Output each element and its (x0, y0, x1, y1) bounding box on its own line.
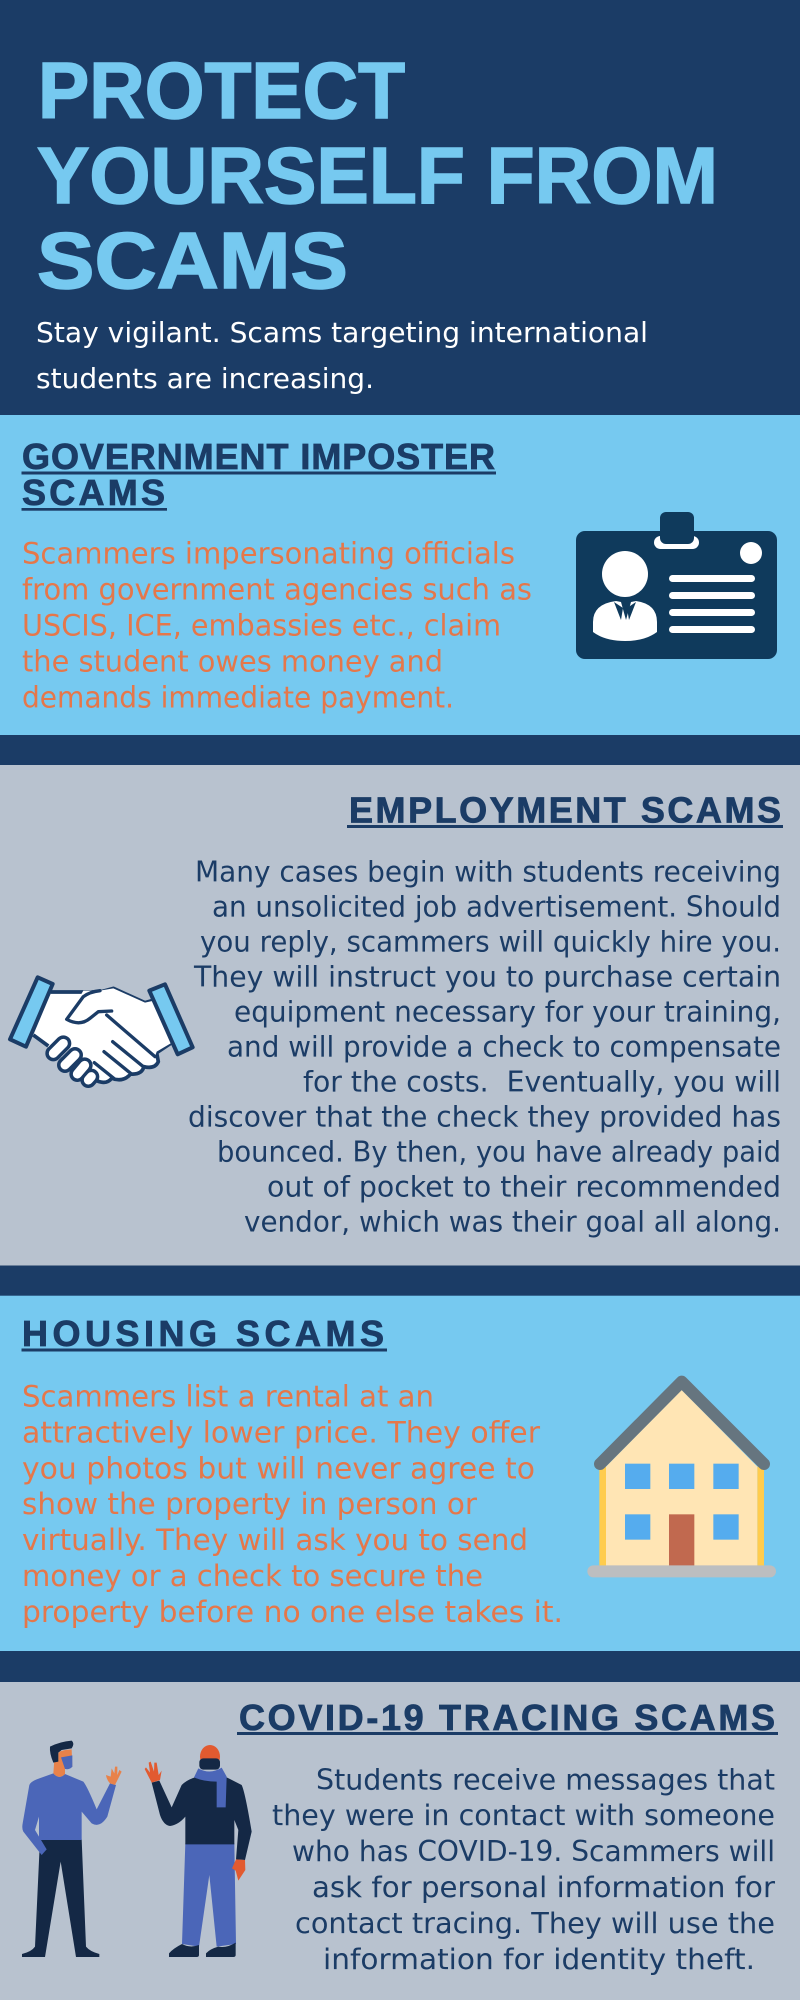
text: government imposter description: the student owes money and (22, 644, 443, 678)
heading: covid-19 tracing scams: COVID-19 TRACING SCAMS (239, 1697, 775, 1738)
text: government imposter description: from government agencies such as (22, 572, 532, 606)
text: covid-19 description: contact tracing. They will use the (295, 1907, 775, 1940)
subtitle (36, 316, 648, 395)
heading: government imposter scams (22, 436, 496, 513)
title: PROTECT (38, 46, 405, 135)
text: government imposter description: Scammers impersonating officials (22, 537, 515, 571)
illustration: two masked people (22, 1741, 252, 1957)
icon: handshake (10, 977, 193, 1083)
icon: id badge (576, 512, 777, 659)
subtitle: students are increasing. (36, 362, 374, 395)
text: housing description: show the property in person or (22, 1487, 477, 1521)
heading: government imposter scams: GOVERNMENT IMPOSTER (22, 436, 495, 477)
panel: housing scams (0, 1296, 800, 1651)
text: government imposter description: USCIS, ICE, embassies etc., claim (22, 608, 501, 642)
subtitle: Stay vigilant. Scams targeting international (36, 316, 648, 349)
text: housing description: virtually. They will ask you to send (22, 1523, 528, 1557)
text: housing description: Scammers list a rental at an (22, 1380, 434, 1414)
text: employment description (188, 856, 781, 1239)
title: YOURSELF FROM (37, 131, 718, 220)
text: government imposter description (22, 537, 532, 714)
panel: header (0, 0, 800, 415)
text: housing description: property before no one else takes it. (22, 1595, 563, 1629)
text: employment description: you reply, scammers will quickly hire you. (200, 926, 781, 959)
text: covid-19 description: they were in contact with someone (272, 1799, 775, 1832)
text: employment description: discover that the check they provided has (188, 1101, 781, 1134)
icon: house (587, 1382, 776, 1577)
text: employment description: bounced. By then, you have already paid (217, 1136, 781, 1169)
text: housing description: money or a check to secure the (22, 1559, 483, 1593)
text: covid-19 description: who has COVID-19. Scammers will (292, 1835, 775, 1868)
text: housing description: attractively lower price. They offer (22, 1415, 540, 1449)
heading: government imposter scams: SCAMS (22, 472, 165, 513)
text: employment description: equipment necessary for your training, (234, 996, 781, 1029)
panel: employment scams (0, 765, 800, 1266)
title (37, 46, 718, 305)
text: housing description: you photos but will never agree to (22, 1451, 535, 1485)
text: employment description: out of pocket to their recommended (267, 1171, 781, 1204)
text: covid-19 description: information for identity theft. (323, 1943, 755, 1976)
text: employment description: an unsolicited job advertisement. Should (212, 891, 781, 924)
text: covid-19 description: Students receive messages that (316, 1763, 775, 1796)
text: employment description: Many cases begin with students receiving (195, 856, 781, 889)
text: employment description: and will provide a check to compensate (227, 1031, 781, 1064)
figure: man in blue sweater (22, 1741, 122, 1957)
text: employment description: for the costs. Eventually, you will (303, 1066, 781, 1099)
panel: government imposter scams (0, 415, 800, 735)
text: employment description: They will instruct you to purchase certain (193, 961, 781, 994)
title: SCAMS (37, 216, 348, 305)
heading: housing scams: HOUSING SCAMS (22, 1313, 384, 1354)
figure: man in dark sweater (145, 1745, 252, 1957)
text: government imposter description: demands immediate payment. (22, 680, 454, 714)
panel: covid-19 tracing scams (0, 1682, 800, 2000)
heading: employment scams: EMPLOYMENT SCAMS (349, 790, 781, 831)
text: housing description (22, 1380, 563, 1629)
text: covid-19 description (272, 1763, 775, 1976)
text: covid-19 description: ask for personal information for (312, 1871, 775, 1904)
text: employment description: vendor, which was their goal all along. (244, 1206, 781, 1239)
